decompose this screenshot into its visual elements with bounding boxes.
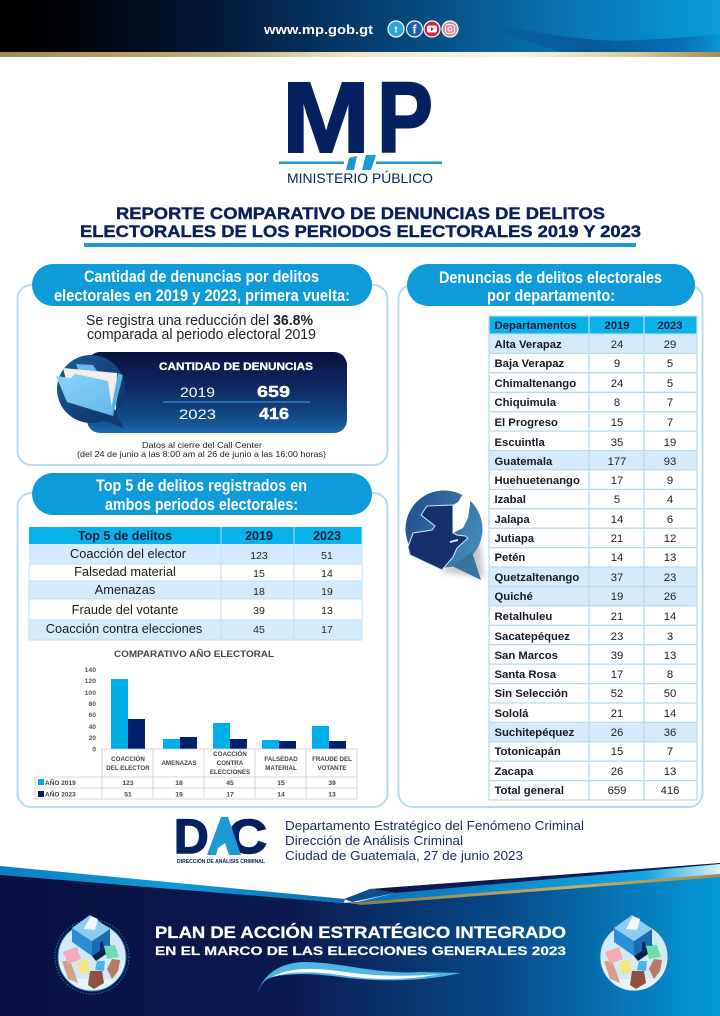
table: top 5 de delitos: Amenazas — [95, 582, 155, 597]
logo: DAC: C — [228, 811, 267, 864]
table: denuncias por departamento: 24 — [611, 378, 623, 390]
table: denuncias por departamento: 13 — [664, 650, 676, 662]
bar chart: comparativo año electoral: 15 — [277, 780, 285, 787]
table: denuncias por departamento: Jutiapa — [494, 533, 535, 545]
table: denuncias por departamento: Chiquimula — [494, 397, 557, 409]
bar chart: comparativo año electoral: 18 — [175, 780, 183, 787]
logo: DAC — [174, 811, 267, 865]
bar chart: comparativo año electoral: AMENAZAS — [161, 760, 197, 767]
heading pill: cantidad de denuncias: Cantidad de denuncias por delitos — [84, 267, 319, 286]
table: denuncias por departamento: San Marcos — [494, 650, 558, 662]
heading pill: cantidad de denuncias: electorales en 2019 y 2023, primera vuelta: — [54, 286, 350, 305]
icon: ballot box right — [597, 915, 671, 994]
table: denuncias por departamento: 6 — [667, 514, 673, 526]
table: denuncias por departamento: 7 — [667, 746, 673, 758]
table: denuncias por departamento: Baja Verapaz — [494, 358, 565, 370]
bar chart: comparativo año electoral: FRAUDE DEL — [312, 756, 352, 763]
bar chart: comparativo año electoral: 120 — [85, 678, 96, 685]
bar chart: comparativo año electoral: VOTANTE — [317, 765, 347, 772]
heading pill: por departamento — [407, 264, 695, 306]
icon: map of Guatemala — [406, 490, 484, 580]
table: denuncias por departamento: 416 — [661, 785, 679, 797]
logo: Ministerio Público: P — [377, 62, 433, 174]
table: denuncias por departamento: 26 — [664, 591, 676, 603]
table: denuncias por departamento: Alta Verapaz — [494, 339, 562, 351]
table: denuncias por departamento: 17 — [611, 669, 623, 681]
table: denuncias por departamento: Santa Rosa — [494, 669, 557, 681]
bar chart: comparativo año electoral: FALSEDAD — [264, 756, 298, 763]
logo: DAC: D — [174, 811, 209, 864]
table: top 5 de delitos: 2023 — [313, 529, 341, 543]
table: denuncias por departamento: 52 — [611, 688, 623, 700]
table: denuncias por departamento: Departamentos — [494, 320, 577, 332]
table: denuncias por departamento: 8 — [614, 397, 620, 409]
table: denuncias por departamento: 17 — [611, 475, 623, 487]
bar chart: comparativo año electoral: 51 — [124, 792, 132, 798]
bar chart: comparativo año electoral: 14 — [277, 792, 285, 798]
header banner — [0, 0, 720, 57]
table: denuncias por departamento: Escuintla — [494, 437, 545, 449]
website address: www.mp.gob.gt — [263, 22, 374, 37]
table: top 5 de delitos: 17 — [321, 624, 333, 636]
bar chart: comparativo año electoral: CONTRA — [217, 760, 244, 767]
data note — [77, 440, 326, 459]
panel: cantidad de denuncias — [18, 264, 388, 465]
table: top 5 de delitos: 13 — [321, 605, 333, 617]
icon: flag wave — [257, 962, 461, 995]
bar chart: comparativo año electoral: 123 — [122, 780, 134, 787]
table: denuncias por departamento: 12 — [664, 533, 676, 545]
title: ELECTORALES DE LOS PERIODOS ELECTORALES 2019 Y 2023 — [80, 223, 641, 241]
table: top 5 de delitos: Falsedad material — [74, 564, 176, 579]
table: top 5 de delitos: 2019 — [245, 529, 273, 543]
bar chart: comparativo año electoral: 17 — [226, 792, 234, 798]
bar chart: comparativo año electoral: 60 — [88, 712, 96, 719]
bar chart: comparativo año electoral: 39 — [328, 780, 336, 787]
table: denuncias por departamento: Suchitepéquez — [494, 727, 575, 739]
table: denuncias por departamento: 14 — [664, 611, 676, 623]
table: top 5 de delitos: 15 — [253, 568, 265, 580]
table: denuncias por departamento: 21 — [611, 708, 623, 720]
table: denuncias por departamento: 21 — [611, 533, 623, 545]
heading pill: cantidad de denuncias — [32, 264, 372, 306]
table: denuncias por departamento: Guatemala — [494, 456, 553, 468]
table: denuncias por departamento: Quetzaltenango — [494, 572, 579, 584]
table: denuncias por departamento: 14 — [664, 708, 676, 720]
table: denuncias por departamento: 7 — [667, 397, 673, 409]
credits text: Ciudad de Guatemala, 27 de junio 2023 — [285, 848, 523, 863]
table: denuncias por departamento: 8 — [667, 669, 673, 681]
bar chart: comparativo año electoral: DEL ELECTOR — [106, 765, 150, 772]
credits text — [285, 818, 584, 863]
heading pill: top 5: ambos periodos electorales: — [105, 495, 298, 514]
stat box: cantidad de denuncias: CANTIDAD DE DENUNCIAS — [159, 361, 313, 373]
logo: Ministerio Público: MINISTERIO PÚBLICO — [287, 170, 433, 186]
bar chart: comparativo año electoral: 19 — [175, 792, 183, 798]
table: denuncias por departamento: 5 — [667, 358, 673, 370]
panel: top 5 de delitos — [18, 473, 388, 807]
footer heading: EN EL MARCO DE LAS ELECCIONES GENERALES 2023 — [155, 944, 566, 958]
bar chart: comparativo año electoral: 80 — [88, 701, 96, 708]
credits text: Dirección de Análisis Criminal — [285, 833, 463, 848]
table: denuncias por departamento: Sin Selección — [494, 688, 568, 700]
table: denuncias por departamento: Total general — [494, 785, 564, 797]
table: denuncias por departamento: 50 — [664, 688, 676, 700]
heading pill: top 5: Top 5 de delitos registrados en — [96, 476, 307, 495]
social media icons: t — [394, 24, 398, 34]
stat box: cantidad de denuncias: 2023 — [179, 406, 216, 422]
table: denuncias por departamento: Totonicapán — [494, 746, 561, 758]
heading pill: por departamento: por departamento: — [487, 286, 615, 305]
table: top 5 de delitos: Top 5 de delitos — [78, 529, 172, 543]
footer heading: PLAN DE ACCIÓN ESTRATÉGICO INTEGRADO — [155, 923, 566, 942]
table: denuncias por departamento — [489, 316, 697, 800]
table: denuncias por departamento: 29 — [664, 339, 676, 351]
bar chart: comparativo año electoral: 140 — [85, 667, 96, 674]
table: denuncias por departamento: 9 — [667, 475, 673, 487]
table: denuncias por departamento: 35 — [611, 437, 623, 449]
table: denuncias por departamento: Retalhuleu — [494, 611, 552, 623]
table: denuncias por departamento: 3 — [667, 631, 673, 643]
table: denuncias por departamento: Chimaltenango — [494, 378, 576, 390]
table: denuncias por departamento: 19 — [664, 437, 676, 449]
table: denuncias por departamento: 19 — [611, 591, 623, 603]
footer heading — [155, 923, 566, 958]
reduction statement: Se registra una reducción del 36.8% — [86, 313, 313, 329]
table: denuncias por departamento: 23 — [611, 631, 623, 643]
bar chart: comparativo año electoral: COMPARATIVO AÑO ELECTORAL — [114, 649, 274, 660]
table: top 5 de delitos: 14 — [321, 568, 333, 580]
data note: Datos al cierre del Call Center — [142, 440, 262, 450]
table: denuncias por departamento: Zacapa — [494, 766, 534, 778]
table: denuncias por departamento: 4 — [667, 494, 673, 506]
table: denuncias por departamento: 13 — [664, 766, 676, 778]
heading pill: top 5 — [32, 473, 372, 515]
bar chart: comparativo año electoral: 100 — [85, 690, 96, 697]
table: denuncias por departamento: 26 — [611, 727, 623, 739]
table: denuncias por departamento: 39 — [611, 650, 623, 662]
bar chart: comparativo año electoral: AÑO 2023 — [45, 790, 76, 798]
bar chart: comparativo año electoral: 20 — [88, 735, 96, 742]
table: denuncias por departamento: 13 — [664, 552, 676, 564]
table: denuncias por departamento: 36 — [664, 727, 676, 739]
table: top 5 de delitos: 18 — [253, 586, 265, 598]
bar chart: comparativo año electoral: ELECCIONES — [210, 769, 250, 776]
logo: Ministerio Público — [279, 62, 442, 186]
bar chart: comparativo año electoral: 13 — [328, 792, 336, 798]
table: denuncias por departamento: Jalapa — [494, 514, 530, 526]
logo: DAC: DIRECCIÓN DE ANÁLISIS CRIMINAL — [177, 857, 266, 865]
table: denuncias por departamento: 15 — [611, 417, 623, 429]
table: denuncias por departamento: 26 — [611, 766, 623, 778]
table: denuncias por departamento: Petén — [494, 552, 525, 564]
social media icons: f — [412, 22, 418, 36]
title — [80, 205, 641, 247]
table: top 5 de delitos: Fraude del votante — [72, 602, 178, 617]
footer banner — [0, 863, 720, 1016]
table: denuncias por departamento: 9 — [614, 358, 620, 370]
table: top 5 de delitos — [29, 527, 362, 640]
table: denuncias por departamento: 14 — [611, 552, 623, 564]
credits text: Departamento Estratégico del Fenómeno Criminal — [285, 818, 584, 833]
table: denuncias por departamento: 23 — [664, 572, 676, 584]
bar chart: comparativo año electoral: COACCIÓN — [213, 750, 247, 758]
data note: (del 24 de junio a las 8:00 am al 26 de junio a las 16:00 horas) — [77, 449, 326, 459]
table: denuncias por departamento: Quiché — [494, 591, 533, 603]
bar chart: comparativo año electoral: MATERIAL — [265, 765, 297, 772]
table: top 5 de delitos: 123 — [250, 550, 268, 562]
reduction statement: comparada al periodo electoral 2019 — [87, 327, 316, 343]
table: denuncias por departamento: 5 — [614, 494, 620, 506]
table: top 5 de delitos: 45 — [253, 624, 265, 636]
table: top 5 de delitos: 51 — [321, 550, 333, 562]
title: REPORTE COMPARATIVO DE DENUNCIAS DE DELITOS — [116, 205, 605, 223]
stat box: cantidad de denuncias — [87, 352, 347, 433]
table: denuncias por departamento: 7 — [667, 417, 673, 429]
bar chart: comparativo año electoral: 45 — [226, 780, 234, 787]
table: top 5 de delitos: Coacción del elector — [70, 546, 187, 561]
table: denuncias por departamento: 5 — [667, 378, 673, 390]
icon: folder — [56, 355, 125, 428]
logo: Ministerio Público: M — [282, 62, 370, 174]
table: denuncias por departamento: 93 — [664, 456, 676, 468]
table: denuncias por departamento: 659 — [608, 785, 626, 797]
table: denuncias por departamento: Huehuetenango — [494, 475, 580, 487]
stat box: cantidad de denuncias: 2019 — [180, 384, 215, 400]
bar chart: comparativo año electoral — [35, 649, 357, 799]
stat box: cantidad de denuncias: 659 — [257, 384, 290, 401]
table: denuncias por departamento: 14 — [611, 514, 623, 526]
table: denuncias por departamento: Izabal — [494, 494, 526, 506]
table: top 5 de delitos: Coacción contra elecciones — [46, 621, 202, 636]
table: denuncias por departamento: 2023 — [657, 320, 683, 332]
table: denuncias por departamento: 37 — [611, 572, 623, 584]
bar chart: comparativo año electoral: 0 — [92, 746, 96, 754]
table: denuncias por departamento: 2019 — [604, 320, 630, 332]
social media icons — [388, 21, 458, 37]
icon: ballot box left — [55, 915, 129, 994]
reduction statement — [86, 313, 316, 343]
table: denuncias por departamento: 21 — [611, 611, 623, 623]
table: denuncias por departamento: Sacatepéquez — [494, 631, 570, 643]
panel: denuncias por departamento — [398, 264, 702, 807]
bar chart: comparativo año electoral: AÑO 2019 — [45, 778, 76, 787]
heading pill: por departamento: Denuncias de delitos electorales — [439, 268, 662, 287]
table: denuncias por departamento: El Progreso — [494, 417, 558, 429]
table: top 5 de delitos: 39 — [253, 605, 265, 617]
bar chart: comparativo año electoral: 40 — [88, 724, 96, 731]
table: denuncias por departamento: 177 — [608, 456, 626, 468]
stat box: cantidad de denuncias: 416 — [259, 406, 289, 423]
table: denuncias por departamento: Sololá — [494, 708, 529, 720]
table: top 5 de delitos: 19 — [321, 586, 333, 598]
bar chart: comparativo año electoral: COACCIÓN — [111, 755, 145, 763]
table: denuncias por departamento: 24 — [611, 339, 623, 351]
table: denuncias por departamento: 15 — [611, 746, 623, 758]
